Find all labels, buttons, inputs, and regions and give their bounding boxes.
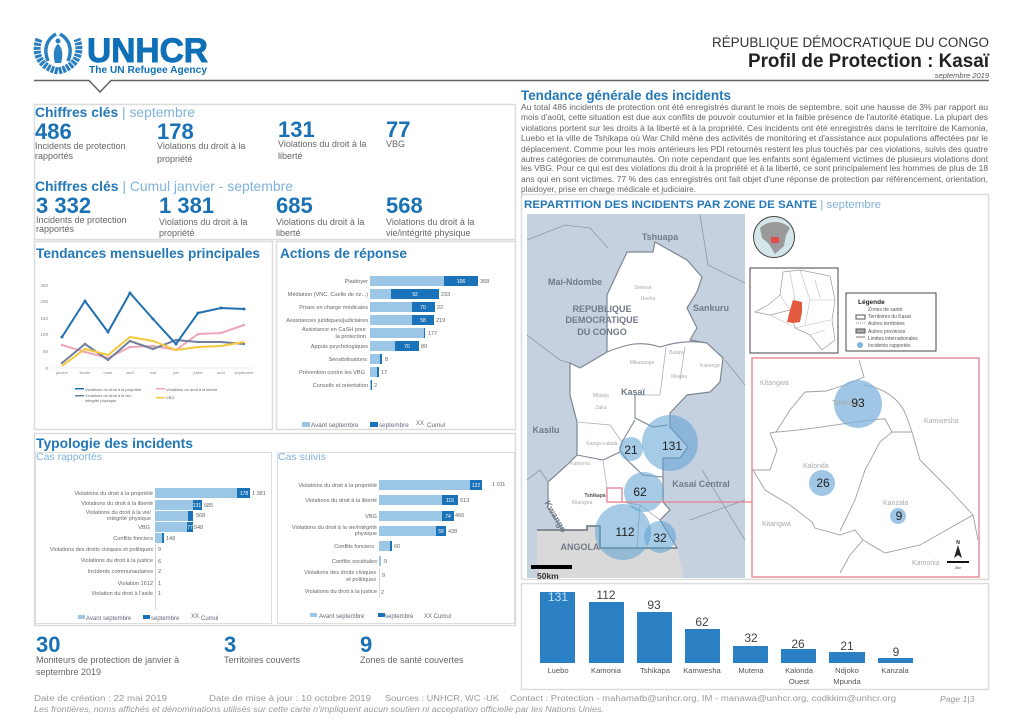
region labels: Mai-Ndombe [548,277,602,287]
region labels: Kitangwa [572,500,592,506]
sub-panel: cas suivis: 9 [384,559,387,565]
key figure: 3 332: rapportés [36,224,75,234]
key figure: 178 [157,119,245,164]
region labels: Bulape [669,350,685,356]
category labels: Mpunda [833,677,861,686]
panel: chiffres clés [34,104,516,240]
line chart: juillet [192,370,203,375]
key figure: 9 zones: Zones de santé couvertes [360,655,464,665]
sub-panel: cas rapportés [36,451,272,624]
key figure: 9 zones [360,632,464,665]
key figure: 3 332: 3 332 [36,193,91,218]
legend box: Autres territoires [868,321,905,327]
sub-panel: cas suivis: 438 [448,529,457,535]
circle values: 112 [615,525,635,539]
key figure: 486: Incidents de protection [35,141,126,151]
key figure: 30 moniteurs: septembre 2019 [36,667,101,677]
sub-panel: cas rapportés: Violations du droit à la justice [81,558,153,564]
line chart: février [79,370,91,375]
region labels: Zaka [595,405,607,411]
detail values: 93 [851,396,865,410]
key figure: 178: 178 [157,119,194,144]
title block: septembre 2019 [935,71,990,80]
footer [34,693,974,714]
category labels: Mutena [738,666,764,675]
chart legend: intégrité physique [85,398,117,403]
sub-panel: cas suivis: 116 [446,498,454,504]
detail labels: Tshikapa [832,400,860,407]
chart legend: Violations du droit à la vie/ [85,393,133,398]
sub-panel: cas rapportés: Conflits fonciers [113,536,153,542]
detail circles [809,380,906,524]
key figure: 77: VBG [386,139,405,149]
bar chart: actions [286,276,489,429]
sub-panel: cas suivis: 513 [460,498,469,504]
sub-panel: cas suivis: 1 011 [492,482,505,488]
key figure: 178: Violations du droit à la [157,141,245,151]
bar chart: actions: 70 [404,344,410,350]
sub-panel: cas suivis: Conflits sociétales [332,559,377,565]
region labels [532,232,730,552]
category labels: Kanzala [881,666,909,675]
sub-panel: cas rapportés: Violations du droit à la propriété [74,491,153,497]
footer: Date de création : 22 mai 2019 [34,693,167,703]
legend: Cumul [201,616,218,622]
sub-panel: cas suivis: et politiques [346,577,376,583]
logo: UNHCR [37,32,208,76]
region labels: Tshuapa [642,232,679,242]
key figure: 568: Violations du droit à la [386,217,474,227]
key figure: 568: 568 [386,193,423,218]
sub-panel: cas suivis: 58 [438,529,444,535]
sub-panel: cas rapportés: Violation 1612 [118,581,153,587]
legend [302,421,445,429]
sub-panel: cas suivis: Violations du droit à la liberté [305,498,377,504]
legend box: Limites internationales [868,336,918,342]
region labels: Kasai Central [672,479,730,489]
bar chart: actions: Plaidoyer [345,279,368,285]
legend: septembre [151,616,180,622]
footer: Date de mise à jour : 10 octobre 2019 [209,693,371,703]
category labels: Kalonda [785,666,814,675]
region labels: Mikanange [630,360,654,366]
sub-panel: cas rapportés: VBG [138,525,150,531]
key figure: 486: 486 [35,119,72,144]
legend box [846,293,936,351]
key figure: 30 moniteurs [36,632,179,677]
footer: Page 1|3 [940,694,974,704]
legend: Avant septembre [311,422,359,429]
text block: tendance générale: autres catégories de communautés. On note cependant que les enfants sont également victimes de plusieurs violations dont [521,155,989,164]
category labels: Ouest [789,677,810,686]
key figure: 486: rapportés [35,151,74,161]
key figure: 30 moniteurs: 30 [36,632,60,657]
bar chart: actions: la protection [336,334,366,340]
values: 93 [647,598,661,612]
key figure: 131 [278,117,366,161]
bar chart: actions: 177 [428,331,437,337]
legend box: Incidents rapportés [868,343,911,349]
sub-panel: cas rapportés: Violations des droits civiques et politiques [50,547,153,553]
sub-panel: cas rapportés: 9 [158,547,161,553]
text block: tendance générale: les VBG. Pour ce qui est des violations du droit à la propriété et à la liberté, ce sont principalement les hommes de plus de 18 [521,164,989,173]
values: 9 [893,645,900,659]
circle values: 32 [653,531,667,545]
legend: Cumul [427,422,445,429]
bar chart: actions: 368 [480,279,489,285]
sub-panel: cas rapportés: 77 [187,525,193,531]
values: 131 [548,590,568,604]
category labels: Ndjoko [835,666,859,675]
bar chart: actions: Appuis psychologiques [311,344,368,350]
sub-panel: cas suivis: Violations du droit à la propriété [298,483,377,489]
map [527,214,752,581]
key figure: 1 381: Violations du droit à la [159,217,247,227]
bar chart: actions: 58 [420,318,426,324]
sub-panel: cas rapportés: Violation du droit à l'asile [91,591,153,597]
sub-panel: cas suivis: Violations du droit à la justice [305,589,377,595]
line chart: janvier [55,370,69,375]
line chart: 0 [45,366,48,371]
detail labels: Kamwesha [924,418,959,425]
sub-panel: cas rapportés: 548 [194,525,203,531]
region labels: Kakenge [700,363,720,369]
bar chart: actions: 2 [374,383,377,389]
line chart: août [217,370,226,375]
detail labels [760,380,959,567]
sub-panel: cas suivis: Violations des droits civiques [304,570,376,576]
sub-panel: cas suivis: physique [355,531,377,537]
region labels: Kasaï [621,387,646,397]
sub-panel: cas rapportés: 2 [158,569,161,575]
sub-panel: cas suivis: Violations du droit à la vie/intégrité [292,525,377,531]
inset DRC map [750,268,838,353]
title block [712,35,990,80]
heading: Tendances mensuelles principales [36,246,260,261]
region labels: Kwango [543,499,569,535]
proportional circles [595,415,698,560]
legend: Avant septembre [86,616,132,622]
line chart: 100 [40,332,48,337]
bar chart: actions: 70 [420,305,426,311]
heading: septembre: Chiffres clés | septembre [35,104,195,120]
circle values: 21 [624,443,638,457]
values: 26 [791,637,805,651]
bar chart: actions: 219 [436,318,445,324]
circle values [615,439,682,545]
line chart: juin [172,370,179,375]
legend box: Légende [858,299,885,306]
inset detail map [752,358,979,577]
sub-panel: cas rapportés: intégrité physique [107,516,151,522]
line chart: avril [126,370,134,375]
region labels: Tshikapa [584,493,606,499]
sub-panel: cas rapportés: 1 [158,581,161,587]
panel: répartition map [522,194,988,581]
key figure: 131: 131 [278,117,315,142]
logo: UNHCR: The UN Refugee Agency [89,64,207,76]
circle values: 62 [633,485,647,499]
region labels: Dekese [635,285,652,291]
bar chart: actions: Assistance en CaSH pour [302,327,366,333]
sub-panel: cas rapportés: Cas rapportés [36,451,102,463]
bar chart: actions: Conseils et orientation [313,383,368,389]
line chart [40,283,254,403]
circle values: 131 [662,439,682,453]
bars [540,592,913,663]
values: 112 [596,588,616,602]
bar chart: actions: Prévention contre les VBG [299,370,365,376]
legend [310,613,451,620]
text block: tendance générale [521,88,989,194]
key figure: 131: Violations du droit à la [278,139,366,149]
text block: tendance générale: plaidoyer, prise en charge médicale et judiciaire. [521,185,696,194]
legend: XX [416,421,424,427]
key figure: 30 moniteurs: Moniteurs de protection de janvier à [36,655,179,665]
sub-panel: cas rapportés: 6 [158,559,161,565]
bar chart: actions: 233 [441,292,450,298]
scale bar: 50km [537,571,559,581]
text block: tendance générale: Au total 486 incidents de protection ont été enregistrés durant le mois de septembre, soit une hausse de 3% par rapport au [521,103,988,112]
bar chart: actions: Prises en charge médicales [299,305,368,311]
panel: tendances mensuelles [34,242,272,430]
category labels [547,666,909,686]
locator box [607,488,622,502]
sub-panel: cas rapportés: 178 [240,491,248,497]
key figure: 685: 685 [276,193,313,218]
sub-panel: cas suivis: VBG [365,514,377,520]
region labels: DU CONGO [577,327,627,337]
legend box: Zones de santé [868,307,903,313]
region labels: Mweka [671,374,687,380]
footer: Sources : UNHCR, WC -UK [385,693,499,703]
text block: tendance générale: violations portent sur les droits à la liberté et à la propriété. Ces incidents ont été enregistrés dans le territoire de Kamonia, [521,124,988,133]
panel: typologie des incidents [34,434,516,626]
detail labels: Kitangwa [760,380,789,387]
line chart: 250 [40,283,48,288]
category labels: Kamwesha [683,666,722,675]
key figure: 685 [276,193,364,238]
key figure: 3 332: Incidents de protection [36,215,127,225]
bar chart: actions: Assistances juridiques/judiciaires [286,318,368,324]
sub-panel: cas suivis [278,451,514,624]
key figure: 3 territoires: Territoires couverts [224,655,301,665]
text block: tendance générale: mois d'août, cette situation est due aux conflits de pouvoir coutumier et la faible présence de l'autorité étatique. La plupart des [521,113,988,122]
heading: cumul: Chiffres clés | Cumul janvier - septembre [35,178,293,194]
region labels: REPUBLIQUE [572,304,632,314]
key figure: 9 zones: 9 [360,632,372,657]
key figure: 685: Violations du droit à la [276,217,364,227]
sub-panel: cas rapportés: 1 [158,591,161,597]
legend: septembre [385,614,414,620]
sub-panel: cas rapportés: Violations du droit à la vie/ [86,510,151,516]
key figure: 3 332 [36,193,127,234]
chart legend [75,387,218,403]
detail values [816,396,903,523]
region labels: Mbanje [593,393,609,399]
sub-panel: cas rapportés: Incidents communautaires [88,569,153,575]
header rule with notch [34,80,989,92]
region labels: Kanga-Lubala [586,441,618,447]
logo: UNHCR: UNHCR [87,32,208,70]
category labels: Kamonia [591,666,622,675]
bar chart: actions: 17 [381,370,387,376]
key figure: 1 381 [159,193,247,238]
sub-panel: cas rapportés: 1 381 [252,491,266,497]
bar chart: actions: 106 [457,279,465,285]
text block: tendance générale: Tendance générale des incidents [521,88,731,103]
values [548,588,900,659]
sub-panel: cas suivis: 9 [382,573,385,579]
footer: Contact : Protection - mahamatb@unhcr.org, IM - manawa@unhcr.org, codkkim@unhcr.org [510,693,896,703]
footer: Les frontières, noms affichés et dénominations utilisés sur cette carte n'impliquent aucun soutien ni acceptation officielle par les Nations Unies. [34,704,604,714]
scale bar [531,565,572,581]
bar chart: actions: Sensibilisations [328,357,367,363]
chart legend: Violations du droit à la propriété [85,387,142,392]
line chart: 50 [43,349,48,354]
bar chart: actions: 80 [421,344,427,350]
text block: tendance générale: ans qui en sont victimes. 77 % des cas enregistrés ont fait objet d'une réponse de protection par référencement, orientation, [521,175,988,184]
region labels: Kamonia [570,461,590,467]
globe locator [754,216,794,258]
icon: laurel and sheltering hands emblem [37,34,79,71]
region labels: DEMOCRATIQUE [565,315,639,325]
heading: Typologie des incidents [36,435,193,451]
heading: Actions de réponse [280,246,407,261]
legend [78,614,218,622]
key figure: 1 381: 1 381 [159,193,214,218]
text block: tendance générale: Luebo et la ville de Tshikapa où War Child mène des activités de monitoring et d'assistance aux populations affectées par le [521,134,989,143]
sub-panel: cas suivis: 122 [472,483,480,489]
detail labels: Kalonda [803,463,829,470]
sub-panel: cas rapportés: 685 [204,503,213,509]
title block: Profil de Protection : Kasaï [748,51,990,72]
legend: septembre [379,422,409,429]
values: 32 [744,631,758,645]
connector [622,501,752,503]
panel: bar chart by health zone [522,584,988,690]
panel: actions de réponse [276,242,516,430]
key figure: 3 territoires [224,632,301,665]
bar chart: actions: 22 [437,305,443,311]
values: 62 [695,615,709,629]
region labels: Kasilu [532,425,560,435]
bar chart: actions: 8 [385,357,388,363]
values: 21 [840,639,854,653]
heading: REPARTITION DES INCIDENTS PAR ZONE DE SANTE | septembre [524,199,881,211]
sub-panel: cas suivis: Conflits fonciers [334,544,374,550]
line chart: 200 [40,299,48,304]
text block: tendance générale: déplacement. Comme pour les mois antérieurs les PDI retournés restent les plus touchés par ces violations, suivis des quatre [521,145,989,154]
key figure: 685: liberté [276,228,301,238]
sub-panel: cas rapportés: 148 [166,536,175,542]
chart legend: Violations du droit à la liberté [166,387,218,392]
legend box: Territoires du Kasaï [868,314,912,320]
category labels: Tshikapa [640,666,671,675]
line chart: septembre [235,370,254,375]
line chart: mai [150,370,156,375]
key figure: 3 territoires: 3 [224,632,236,657]
north arrow and scale [947,540,969,570]
region labels: Ueeka [641,296,655,302]
legend: Avant septembre [319,614,365,620]
legend: XX [191,614,199,620]
region labels: ANGOLA [560,542,600,552]
sub-panel: cas suivis: 2 [381,590,384,596]
bar chart: actions: Médiation (VNC, Cuelle de riz...) [288,292,368,298]
sub-panel: cas rapportés: Violations du droit à la liberté [81,501,153,507]
sub-panel: cas suivis: Cas suivis [278,451,326,463]
sub-panel: cas suivis: 60 [394,544,400,550]
legend box: Autres provinces [868,329,906,335]
detail labels: Kitangwa [762,521,791,528]
key figure: 77: 77 [386,117,410,142]
north arrow and scale: 2km [955,566,961,570]
title block: RÉPUBLIQUE DÉMOCRATIQUE DU CONGO [712,35,989,50]
region labels: Sankuru [693,303,729,313]
sub-panel: cas suivis: 74 [445,514,451,520]
detail labels: Kanzala [883,500,908,507]
key figure: 178: propriété [157,154,193,164]
sub-panel: cas rapportés: 131 [193,503,201,509]
north arrow and scale: N [956,540,960,546]
category labels: Luebo [547,666,569,675]
key figure: 486 [35,119,126,161]
key figure: 1 381: propriété [159,228,195,238]
chart legend: VBG [166,395,174,400]
key figure: 568 [386,193,474,238]
key figure: 568: vie/intégrité physique [386,228,471,238]
bar chart: actions: 92 [412,292,418,298]
line chart: 150 [40,316,48,321]
sub-panel: cas rapportés: 568 [196,513,205,519]
detail labels: Kamonia [912,560,940,567]
detail values: 9 [896,509,903,523]
detail values: 26 [816,476,830,490]
line chart: mars [104,370,112,375]
key figure: 131: liberté [278,151,303,161]
legend: XX Cumul [424,614,451,620]
sub-panel: cas suivis: 466 [455,513,464,519]
